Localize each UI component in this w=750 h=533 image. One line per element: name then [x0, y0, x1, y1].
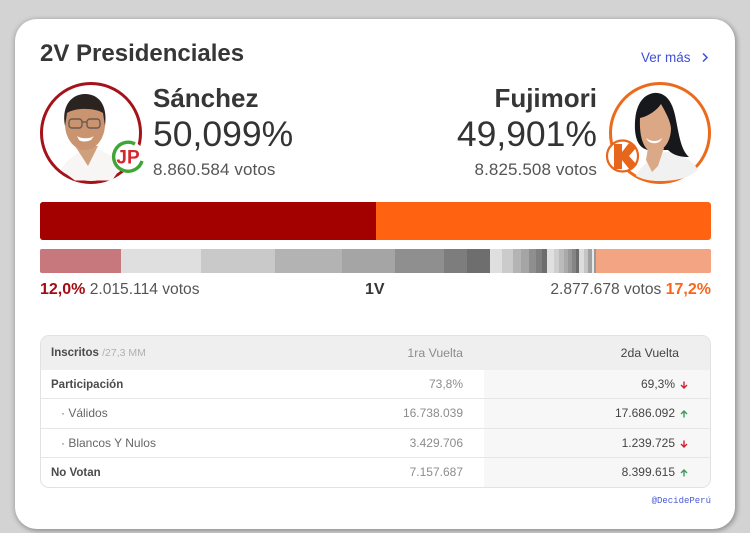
- candidate: Sánchez: [153, 83, 293, 179]
- percentage: 49,901%: [457, 114, 597, 154]
- second round column shade: [484, 369, 710, 487]
- logo: K: [607, 140, 638, 172]
- title: 2V Presidenciales: [40, 40, 244, 67]
- row: participación: 69,3%: [641, 377, 675, 391]
- candidate portrait: Sánchez: [40, 82, 144, 184]
- percentage: 50,099%: [153, 114, 293, 154]
- Sánchez share: [40, 202, 376, 240]
- Sánchez first round: [40, 249, 121, 273]
- row: blancos y nulos: [61, 436, 688, 450]
- label: 1V: 1V: [365, 281, 385, 298]
- row: blancos y nulos: 3.429.706: [410, 436, 463, 450]
- row: blancos y nulos: 1.239.725: [622, 436, 675, 450]
- row: participación: 73,8%: [429, 377, 463, 391]
- row: válidos: 17.686.092: [615, 406, 675, 420]
- first round bar: [40, 249, 711, 273]
- row: participación: [51, 377, 688, 391]
- table header: 2da Vuelta: [621, 346, 679, 360]
- table header: [41, 336, 710, 370]
- row: válidos: · Válidos: [61, 406, 108, 420]
- logo: JP: JP: [116, 148, 140, 168]
- candidate: Fujimori: [457, 83, 597, 179]
- link: ver más: Ver más: [641, 50, 691, 65]
- credit: @DecidePerú: [652, 496, 711, 506]
- name: Sánchez: [153, 83, 258, 113]
- table header: 1ra Vuelta: [407, 346, 463, 360]
- row: no votan: 7.157.687: [410, 465, 463, 479]
- row: válidos: 16.738.039: [403, 406, 463, 420]
- first round left label: 12,0% 2.015.114 votos: [40, 281, 200, 298]
- row: blancos y nulos: · Blancos Y Nulos: [61, 436, 156, 450]
- Fujimori first round: [596, 249, 711, 273]
- row: participación: Participación: [51, 379, 123, 391]
- table header: Inscritos /27,3 MM: [51, 347, 146, 359]
- second round result bar: [40, 202, 711, 240]
- candidate portrait: Fujimori: [606, 82, 711, 184]
- votes: 8.825.508 votos: [475, 160, 597, 179]
- first round right label: 2.877.678 votos 17,2%: [550, 281, 711, 298]
- row: no votan: [51, 465, 688, 479]
- name: Fujimori: [494, 83, 597, 113]
- row: no votan: No Votan: [51, 467, 101, 479]
- table: [40, 335, 711, 488]
- row: no votan: 8.399.615: [622, 465, 675, 479]
- row: válidos: [61, 406, 688, 420]
- votes: 8.860.584 votos: [153, 160, 275, 179]
